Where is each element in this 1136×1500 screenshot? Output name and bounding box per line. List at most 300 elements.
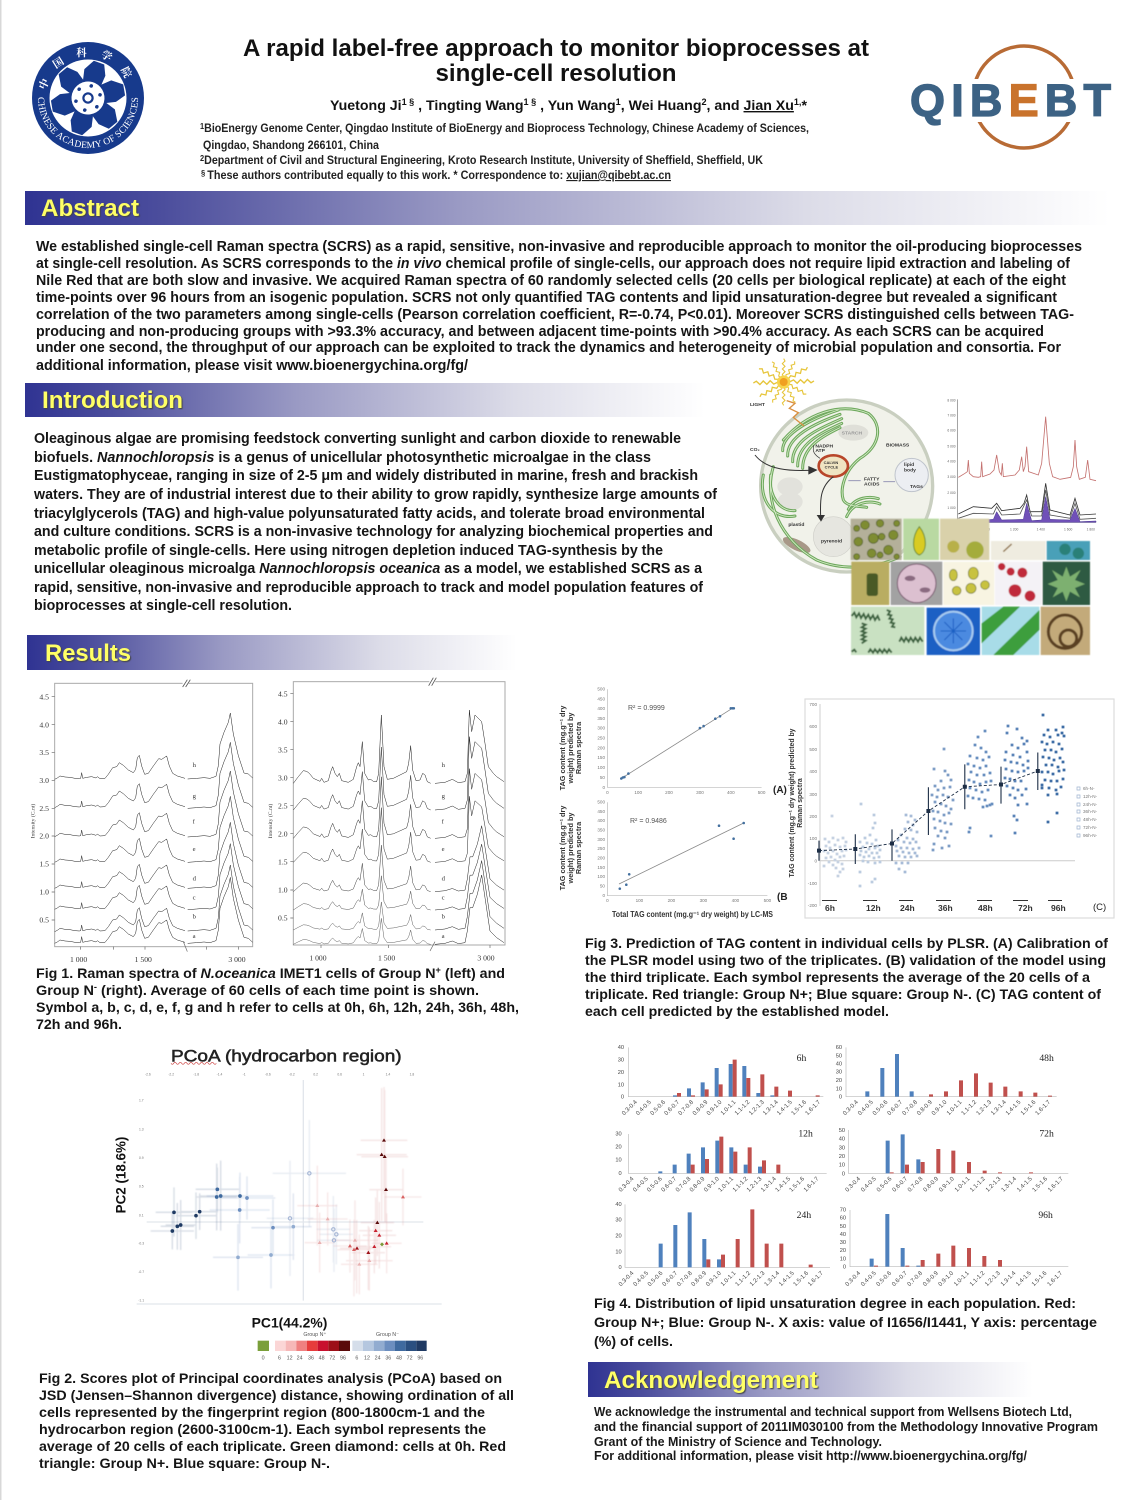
histogram: 6h: 0.4-0.5 (635, 1099, 653, 1117)
chart: Group N- spectra: g (442, 793, 446, 800)
inset chart: Raman spectra: 1 000 (982, 528, 990, 532)
chart A: calibration: 250 (597, 736, 605, 740)
inset chart: Raman spectra: 2 000 (947, 491, 956, 495)
caption: figure 1: + (436, 965, 441, 975)
chart: Group N- spectra: 1 000 (309, 953, 327, 962)
chart B: validation: 400 (597, 818, 605, 823)
axis title: PC2: PC2 (18.6%) (113, 1137, 128, 1213)
histogram: 6h: 1.0-1.1 (720, 1099, 738, 1117)
legend: 24h-N- (1083, 802, 1098, 807)
axis tick labels: -0.6 (265, 1072, 271, 1076)
caption: figure 3 (585, 935, 1108, 1019)
chart A: calibration: 350 (597, 716, 605, 721)
histogram: 24h: 0.5-0.6 (647, 1270, 665, 1288)
legend (1077, 786, 1098, 838)
histogram: 72h: 1.4-1.5 (1016, 1176, 1034, 1194)
authors: , and (707, 97, 744, 113)
colour legend: 6 (278, 1355, 281, 1361)
histogram: 48h: 0.9-1.0 (931, 1099, 949, 1117)
histogram: 6h: 0.8-0.9 (692, 1099, 710, 1117)
caption: figure 1: 72h and 96h. (36, 1016, 122, 1032)
affiliations: § (201, 169, 207, 178)
chart B: validation: 500 (597, 800, 605, 804)
chart: Group N- spectra (267, 678, 505, 962)
diagram: photosynthetic cell (750, 400, 933, 572)
caption: figure 2: Fig 2. Scores plot of Principal coordinates analysis (PCoA) based on (39, 1370, 502, 1386)
legend: 72h-N- (1083, 825, 1098, 830)
chart: Group N+ spectra: 1 500 (135, 955, 152, 964)
histogram: 48h: 1.1-1.2 (961, 1099, 979, 1117)
logo: QIBEBT: QIBEBT (910, 75, 1111, 126)
section header: Abstract: Abstract (41, 195, 139, 222)
authors: 1, (794, 97, 801, 107)
chart: Group N+ spectra: 3.5 (39, 748, 49, 757)
chart C: single-cell TAG content: -200 (808, 903, 817, 908)
inset chart: Raman spectra: 6 000 (947, 428, 956, 432)
illustration: algal cell, Raman spectra and algae photos (750, 359, 1098, 655)
chart B: validation: 350 (597, 828, 605, 832)
axis tick labels: 0.9 (139, 1156, 144, 1160)
chart C: single-cell TAG content: 100 (809, 836, 817, 841)
chart: Group N+ spectra: g (193, 793, 197, 800)
chart: Group N- spectra: Intensity (C.nt) (267, 804, 274, 838)
chart A: calibration: Raman spectra (574, 721, 583, 774)
time labels: 96h (1051, 903, 1066, 913)
diagram: photosynthetic cell: CYCLE (825, 465, 839, 470)
histogram: 48h: 48h (1039, 1053, 1054, 1064)
legend: 36h-N- (1083, 809, 1098, 814)
caption: figure 3: Fig 3. Prediction of TAG content in individual cells by PLSR. (A) Calibration of (585, 935, 1108, 951)
colour legend: 48 (319, 1355, 325, 1361)
chart A: calibration: 400 (597, 706, 605, 711)
histogram: 6h: 0 (621, 1095, 624, 1101)
histogram: 6h: 0.6-0.7 (664, 1099, 682, 1117)
histogram: 24h: 1.6-1.7 (807, 1270, 825, 1288)
chart: Group N- spectra: 2.5 (278, 801, 288, 810)
histogram: 72h: 1.2-1.3 (985, 1176, 1003, 1194)
chart C: single-cell TAG content (789, 699, 1114, 918)
histogram: 96h: 1.5-1.6 (1031, 1270, 1049, 1288)
histogram: 96h: 1.3-1.4 (1000, 1270, 1018, 1288)
histogram: 12h: 1.2-1.3 (746, 1176, 764, 1194)
histogram: 12h: 0.5-0.6 (646, 1176, 664, 1194)
diagram: photosynthetic cell: ACIDS (864, 482, 880, 488)
icon: sun (753, 359, 814, 426)
histogram: 12h (615, 1129, 827, 1194)
affiliations: Department of Civil and Structural Engineering, Kroto Research Institute, University of Sheffield, Sheffield, UK (204, 155, 764, 167)
axis tick labels: -0.2 (289, 1072, 295, 1076)
authors: , Tingting Wang (414, 97, 524, 113)
histogram: 6h: 10 (618, 1082, 624, 1088)
histogram: 96h: 20 (840, 1248, 846, 1254)
chart B: validation: 250 (597, 846, 605, 851)
chart B: validation: 0 (602, 893, 605, 898)
histogram: 48h: 0.7-0.8 (902, 1099, 920, 1117)
histogram: 48h: 0 (839, 1095, 842, 1101)
chart: Group N+ spectra: b (193, 914, 197, 921)
histogram: 12h: 0 (619, 1171, 622, 1177)
introduction text: rapid, sensitive, non-invasive and reproducible approach to track and model population features of (34, 580, 703, 596)
chart: Group N- spectra: 3.0 (278, 773, 288, 782)
title: single-cell resolution (436, 60, 676, 87)
histogram: 12h: 1.4-1.5 (775, 1176, 793, 1194)
axis tick labels: -0.7 (138, 1270, 144, 1274)
chart C: single-cell TAG content: 300 (809, 792, 817, 797)
chart: Group N- spectra: 1.0 (278, 886, 288, 895)
colour legend: 36 (308, 1355, 314, 1361)
inset chart: Raman spectra: 3 000 (947, 475, 956, 479)
histogram: 48h: 1.3-1.4 (990, 1099, 1008, 1117)
chart A: calibration: 0 (606, 790, 609, 795)
chart B: validation: 50 (600, 884, 605, 888)
caption: figure 2 (39, 1370, 514, 1471)
chart B: validation: R² = 0.9486 (630, 818, 667, 825)
algae photo grid (851, 519, 1090, 655)
chart B: validation: 450 (597, 809, 605, 814)
diagram: photosynthetic cell: LIGHT (750, 402, 765, 408)
colour legend: Group N⁺ (303, 1332, 326, 1338)
time labels: (C) (1093, 902, 1106, 913)
chart C: single-cell TAG content: 500 (809, 747, 817, 752)
caption: figure 2: JSD (Jensen–Shannon divergence) distance, showing ordination of all (39, 1387, 514, 1403)
histogram: 72h: 40 (839, 1137, 845, 1143)
histogram: 6h: 1.3-1.4 (762, 1099, 780, 1117)
chart C: single-cell TAG content: 200 (809, 814, 817, 819)
histogram: 12h: 0.4-0.5 (632, 1176, 650, 1194)
diagram: photosynthetic cell: ATP (815, 448, 826, 454)
histogram: 24h: 0.8-0.9 (691, 1270, 709, 1288)
legend: 12h-N- (1083, 794, 1098, 799)
diagram: photosynthetic cell: BIOMASS (886, 443, 910, 449)
caption: figure 1 (36, 965, 519, 1032)
chart A: calibration: 500 (758, 790, 766, 795)
introduction text (33, 431, 717, 614)
colour legend: Group N⁻ (376, 1332, 399, 1338)
colour legend: 96 (417, 1355, 423, 1361)
authors: Jian Xu (744, 97, 794, 113)
error bars (151, 1087, 421, 1296)
histogram: 72h: 0.6-0.7 (892, 1176, 910, 1194)
legend: 48h-N- (1083, 817, 1098, 822)
caption: figure 4: (%) of cells. (594, 1333, 673, 1349)
histogram: 6h: 0.5-0.6 (650, 1099, 668, 1117)
histogram: 12h: 0.8-0.9 (689, 1176, 707, 1194)
histogram: 6h: 0.7-0.8 (678, 1099, 696, 1117)
section header: Results (27, 635, 517, 670)
chart: Group N- spectra: 1 500 (378, 953, 395, 962)
histogram: 48h: 0.5-0.6 (872, 1099, 890, 1117)
time labels: 48h (978, 903, 993, 913)
authors: * (801, 97, 808, 113)
introduction text: waters. They are of industrial interest due to their ability to grow rapidly, synthesize large amounts of (33, 487, 717, 503)
histogram: 72h: 0.4-0.5 (860, 1176, 878, 1194)
chart A: calibration (558, 686, 787, 796)
caption: figure 1: Fig 1. Raman spectra of N.oceanica IMET1 cells of Group N (36, 965, 433, 981)
inset chart: Raman spectra: 1 600 (1064, 528, 1072, 532)
axis tick labels: 1 (363, 1072, 365, 1076)
histogram: 12h: 10 (615, 1158, 622, 1164)
caption: figure 1: Group N (36, 982, 92, 998)
histogram: 24h: 40 (615, 1202, 622, 1208)
caption: figure 2: hydrocarbon region (2600-3100cm-1). Each symbol represents the (39, 1421, 486, 1437)
chart C: single-cell TAG content: 400 (809, 769, 817, 774)
figure 4: lipid unsaturation histograms (615, 1045, 1068, 1288)
histogram: 12h: 0.3-0.4 (618, 1176, 636, 1194)
introduction text: bioprocesses at single-cell resolution. (34, 598, 292, 614)
histogram: 24h: 0.4-0.5 (633, 1270, 651, 1288)
histogram: 48h: 1.5-1.6 (1020, 1099, 1038, 1117)
histogram: 96h (840, 1208, 1068, 1288)
red triangles: Group N+ (315, 1138, 405, 1266)
histogram: 12h: 1.0-1.1 (718, 1176, 736, 1194)
chart A: calibration: 300 (597, 726, 605, 731)
colour legend: 36 (385, 1355, 391, 1361)
axis tick labels: -1 (243, 1072, 246, 1076)
authors: 1 (616, 97, 621, 107)
time labels: 24h (900, 903, 915, 913)
chart: Group N+ spectra: a (193, 933, 196, 940)
histogram: 96h: 60 (840, 1216, 846, 1222)
chart: Group N- spectra: f (442, 819, 445, 826)
chart: Group N+ spectra: 0.5 (39, 916, 49, 925)
chart A: calibration: (A) (773, 785, 787, 796)
chart A: calibration: weight) predicted by (566, 712, 575, 784)
chart A: calibration: 100 (597, 765, 605, 770)
caption: figure 2: cells represented by the fingerprint region (800-1800cm-1 and the (39, 1404, 485, 1420)
axis tick labels: -0.3 (138, 1242, 144, 1246)
chart B: validation: (B (777, 892, 788, 903)
acknowledgement text: and the financial support of 2011IM030100 from the Methodology Innovative Program (594, 1420, 1098, 1434)
chart A: calibration: 300 (696, 790, 704, 795)
histogram: 72h: 30 (839, 1145, 845, 1151)
histogram: 6h (618, 1045, 823, 1117)
histogram: 24h: 1.2-1.3 (749, 1270, 767, 1288)
time labels (822, 900, 1106, 913)
histogram: 12h: 30 (615, 1132, 622, 1138)
chart: Group N+ spectra: 1 000 (70, 955, 87, 964)
histogram: 24h: 1.3-1.4 (764, 1270, 782, 1288)
caption: figure 3: each cell predicted by the established model. (585, 1003, 889, 1019)
histogram: 72h: 0.3-0.4 (845, 1176, 863, 1194)
chart: Group N- spectra: 2.0 (278, 829, 288, 838)
histogram: 96h: 96h (1038, 1210, 1053, 1221)
histogram: 96h: 1.2-1.3 (984, 1270, 1002, 1288)
chart C: single-cell TAG content: 0 (814, 858, 817, 864)
chart B: validation: Raman spectra (574, 821, 583, 874)
histogram: 24h: 1.4-1.5 (778, 1270, 796, 1288)
chart B: validation: 150 (597, 865, 605, 870)
histogram: 12h: 12h (798, 1129, 813, 1140)
histogram: 96h: 1.0-1.1 (953, 1270, 971, 1288)
histogram: 72h: 1.1-1.2 (969, 1176, 987, 1194)
colour legend: 72 (329, 1355, 335, 1361)
histogram: 96h: 0.4-0.5 (860, 1270, 878, 1288)
diagram: photosynthetic cell: body (904, 467, 916, 473)
affiliations (200, 122, 809, 182)
figure 3: TAG prediction (558, 686, 1114, 919)
chart A: calibration: 150 (597, 755, 605, 760)
chart: Group N- spectra: d (442, 875, 446, 882)
chart: Group N+ spectra (29, 680, 253, 964)
histogram: 24h: 0.9-1.0 (705, 1270, 723, 1288)
histogram: 48h: 0.8-0.9 (916, 1099, 934, 1117)
diagram: photosynthetic cell: TAGs (910, 484, 923, 490)
inset chart: Raman spectra: 8 000 (947, 398, 956, 402)
chart: Group N+ spectra: d (193, 875, 197, 882)
histogram: 24h: 10 (615, 1249, 622, 1255)
histogram: 12h: 0.7-0.8 (675, 1176, 693, 1194)
histogram: 6h: 1.4-1.5 (776, 1099, 794, 1117)
chart A: calibration: 450 (597, 696, 605, 701)
chart B: validation: weight) predicted by (566, 812, 575, 884)
histogram: 72h: 1.0-1.1 (954, 1176, 972, 1194)
histogram: 6h: 1.1-1.2 (734, 1099, 752, 1117)
histogram: 96h: 10 (840, 1256, 846, 1262)
diagram: photosynthetic cell: NADPH (815, 443, 833, 449)
chart title: PCoA (hydrocarbon region) (171, 1047, 402, 1066)
time labels: 36h (938, 903, 953, 913)
diagram: photosynthetic cell: FATTY (864, 477, 880, 483)
axis tick labels: 0.5 (139, 1184, 144, 1188)
histogram: 12h: 0.9-1.0 (703, 1176, 721, 1194)
chart: Group N+ spectra: h (193, 762, 197, 769)
authors: 2 (701, 97, 707, 107)
histogram: 6h: 30 (618, 1058, 624, 1064)
diagram: photosynthetic cell: lipid (904, 462, 914, 468)
affiliations: 1 (200, 122, 205, 131)
time labels: 6h (825, 903, 835, 913)
caption: figure 1: - (94, 982, 97, 992)
chart A: calibration: R² = 0.9999 (628, 705, 665, 712)
chart: Group N+ spectra: 4.5 (39, 692, 49, 701)
scatter points (824, 715, 1064, 886)
inset chart: Raman spectra (943, 395, 1098, 541)
histogram: 24h: 0.6-0.7 (662, 1270, 680, 1288)
caption: figure 3: triplicate. Red triangle: Group N+; Blue square: Group N-. (C) TAG content of (585, 986, 1101, 1002)
histogram: 24h: 0.3-0.4 (618, 1270, 636, 1288)
chart: Group N- spectra: h (442, 762, 446, 769)
chart: Group N+ spectra: Intensity (C.nt) (29, 804, 36, 838)
inset chart: Raman spectra: 1 000 (947, 506, 956, 510)
colour legend: 24 (297, 1355, 303, 1361)
histogram: 72h: 0 (842, 1171, 845, 1177)
chart: Group N+ spectra: 3.0 (39, 776, 49, 785)
histogram: 48h: 1.2-1.3 (976, 1099, 994, 1117)
histogram: 96h: 0.6-0.7 (891, 1270, 909, 1288)
chart B: validation: 100 (597, 874, 605, 879)
chart: Group N- spectra: 4.5 (278, 689, 288, 698)
histogram: 48h: 0.3-0.4 (842, 1099, 860, 1117)
chart: Group N- spectra: 4.0 (278, 717, 288, 726)
histogram: 96h: 40 (840, 1232, 846, 1238)
colour legend: 6 (355, 1355, 358, 1361)
chart: Group N- spectra: a (442, 933, 445, 940)
authors: 1 § (402, 97, 414, 107)
histogram: 96h: 1.1-1.2 (969, 1270, 987, 1288)
authors: 1 § (524, 97, 536, 107)
inset chart: Raman spectra: 1 800 (1087, 528, 1095, 532)
colour legend: 24 (375, 1355, 381, 1361)
chart B: validation: 500 (764, 898, 772, 903)
abstract text: time-points over 96 hours from an isogenic population. SCRS not only quantified TAG contents and lipid unsaturation-degree but revealed a significant (36, 290, 1057, 306)
histogram: 24h: 0.7-0.8 (676, 1270, 694, 1288)
axis tick labels: -1.8 (193, 1072, 199, 1076)
chart A: calibration: 50 (600, 775, 605, 780)
histogram: 12h: 1.1-1.2 (732, 1176, 750, 1194)
logo: Chinese Academy of Sciences (32, 42, 144, 154)
section header: Acknowledgement: Acknowledgement (604, 1367, 818, 1394)
histogram: 48h: 60 (836, 1045, 842, 1051)
authors: , Yun Wang (536, 97, 616, 113)
axis tick labels: 1.8 (410, 1072, 414, 1076)
histogram: 24h: 0 (619, 1265, 622, 1271)
histogram: 72h: 1.3-1.4 (1001, 1176, 1019, 1194)
histogram: 6h: 0.9-1.0 (706, 1099, 724, 1117)
section header: Introduction (25, 383, 705, 417)
chart: Group N- spectra: b (442, 914, 446, 921)
abstract text: producing and non-producing groups with >93.3% accuracy, and between adjacent time-points with >90.4% accuracy. As each SCRS can be acquired (36, 324, 1044, 340)
histogram: 24h: 20 (615, 1234, 622, 1240)
introduction text: Eustigmatophyceae, ranging in size of 2-5 μm and widely distributed in marine, fresh and brackish (34, 468, 698, 484)
histogram: 48h: 20 (836, 1078, 842, 1084)
colour legend: 12 (364, 1355, 370, 1361)
inset chart: Raman spectra: 4 000 (947, 460, 956, 464)
axis tick labels: 0.2 (313, 1072, 318, 1076)
diagram: photosynthetic cell: CO₂ (750, 447, 760, 453)
authors: Yuetong Ji (330, 97, 401, 113)
affiliations: These authors contributed equally to this work. * Correspondence to: (207, 170, 566, 182)
histogram: 48h: 40 (836, 1062, 842, 1068)
axis tick labels: 1.3 (139, 1128, 144, 1132)
chart: Group N+ spectra: 1.5 (39, 860, 49, 869)
abstract text: Nile Red that are both slow and invasive. We acquired Raman spectra of 60 randomly selected cells (20 cells per biological replicate) at each of the eight (36, 273, 1066, 289)
axis tick labels (138, 1072, 414, 1302)
histogram: 24h: 1.1-1.2 (735, 1270, 753, 1288)
histogram: 96h: 1.6-1.7 (1047, 1270, 1065, 1288)
time labels: 12h (866, 903, 881, 913)
chart: Group N+ spectra: 2.0 (39, 832, 49, 841)
chart: Group N- spectra: 0.5 (278, 914, 288, 923)
chart C: single-cell TAG content: 700 (809, 702, 817, 707)
colour legend: 72 (407, 1355, 413, 1361)
histogram: 96h: 0.5-0.6 (876, 1270, 894, 1288)
acknowledgement text: Grant of the Ministry of Science and Technology. (594, 1435, 882, 1449)
histogram: 72h: 1.6-1.7 (1047, 1176, 1065, 1194)
histogram: 12h: 20 (615, 1145, 622, 1151)
histogram: 6h: 40 (618, 1045, 624, 1051)
axis tick labels: 1.4 (386, 1072, 390, 1076)
axis tick labels: -1.4 (217, 1072, 223, 1076)
caption: figure 3: the PLSR model using two of the triplicates. (B) validation of the model using (585, 952, 1106, 968)
abstract text: additional information, please visit www.bioenergychina.org/fg/ (36, 358, 468, 374)
inset chart: Raman spectra: 1 400 (1037, 528, 1045, 532)
histogram: 6h: 1.6-1.7 (805, 1099, 823, 1117)
diagram: photosynthetic cell: CALVIN (824, 460, 838, 465)
caption: figure 4 (594, 1295, 1097, 1349)
chart: Group N- spectra: c (442, 895, 445, 902)
section header: Results: Results (45, 640, 131, 667)
chart: Group N- spectra: 3 000 (477, 953, 495, 962)
chart B: validation: 300 (700, 898, 708, 903)
legend: 6h-N- (1083, 786, 1095, 791)
histogram: 96h: 70 (840, 1208, 846, 1214)
histogram: 72h: 20 (839, 1154, 845, 1160)
diagram: photosynthetic cell: pyrenoid (821, 538, 842, 544)
legend: 96h-N- (1083, 833, 1098, 838)
chart A: calibration: 200 (665, 790, 673, 795)
time labels: 72h (1018, 903, 1033, 913)
chart: Group N- spectra: 1.5 (278, 857, 288, 866)
